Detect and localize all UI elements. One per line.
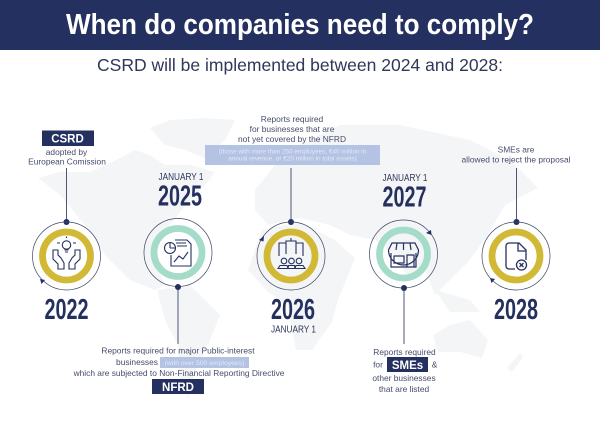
highlight: thresholds: (those with more than 250 employees, €40 million in [219,148,367,156]
2027 description: for [373,360,383,370]
year 2028: 2028 [494,294,538,326]
2027 ring [370,220,438,288]
date label: JANUARY 1 [382,173,428,184]
2028 ring [482,222,550,290]
2027 description: Reports required [373,347,436,357]
2027 description: other businesses [372,373,436,383]
icon: hands with lightbulb [53,236,80,269]
milestone 2025 [73,172,285,394]
2026 description: not yet covered by the NFRD [238,134,346,144]
2027 description: & [432,360,438,370]
SMEs label [387,357,428,372]
highlight: employees: (with over 500 employees) [165,360,244,367]
milestone 2022 [28,130,106,326]
milestone 2026 [205,114,380,336]
subtitle: CSRD will be implemented between 2024 and 2028: [97,55,503,75]
CSRD label: CSRD [51,134,84,146]
year 2022: 2022 [44,294,88,326]
year 2027: 2027 [382,182,426,214]
2025 description: Reports required for major Public-interest [101,346,255,356]
2022 description: European Comission [28,156,106,166]
2025 ring [144,218,212,286]
CSRD label [42,130,94,146]
SMEs label: SMEs [392,360,423,372]
2026 description: Reports required [261,114,324,124]
year 2025: 2025 [158,180,202,212]
NFRD label [152,379,204,394]
2025 description: which are subjected to Non-Financial Reporting Directive [73,368,285,378]
world map [38,118,538,398]
year 2026: 2026 [271,294,315,326]
2026 ring [257,222,325,290]
highlight: thresholds [205,145,380,165]
NFRD label: NFRD [162,382,194,394]
2027 description: that are listed [379,384,429,394]
icon: rejected document [506,243,526,270]
highlight: employees [160,357,249,368]
icon: buildings and people [278,238,305,268]
2025 description: businesses [116,357,158,367]
2022 connector [64,168,70,225]
2026 description [238,114,346,144]
2027 connector [401,285,407,344]
icon: report [164,240,191,266]
2025 description [73,346,285,378]
2022 description [28,147,106,166]
2028 description: SMEs are [498,144,535,154]
2022 description: adopted by [46,147,88,157]
2028 connector [514,168,520,225]
2028 description: allowed to reject the proposal [462,154,571,164]
title: When do companies need to comply? [66,9,534,41]
title banner [0,0,600,50]
highlight: thresholds: annual revenue, or €20 million in total assets) [228,156,357,162]
2026 connector [288,168,294,225]
icon: storefront [388,243,418,267]
2025 connector [175,284,181,344]
2026 description: for businesses that are [250,124,335,134]
date label: JANUARY 1 [271,324,316,336]
date label: JANUARY 1 [158,172,204,183]
2027 description [372,347,438,394]
milestone 2028 [462,144,571,326]
2022 ring [32,222,100,290]
2028 description [462,144,571,164]
milestone 2027 [370,173,438,394]
